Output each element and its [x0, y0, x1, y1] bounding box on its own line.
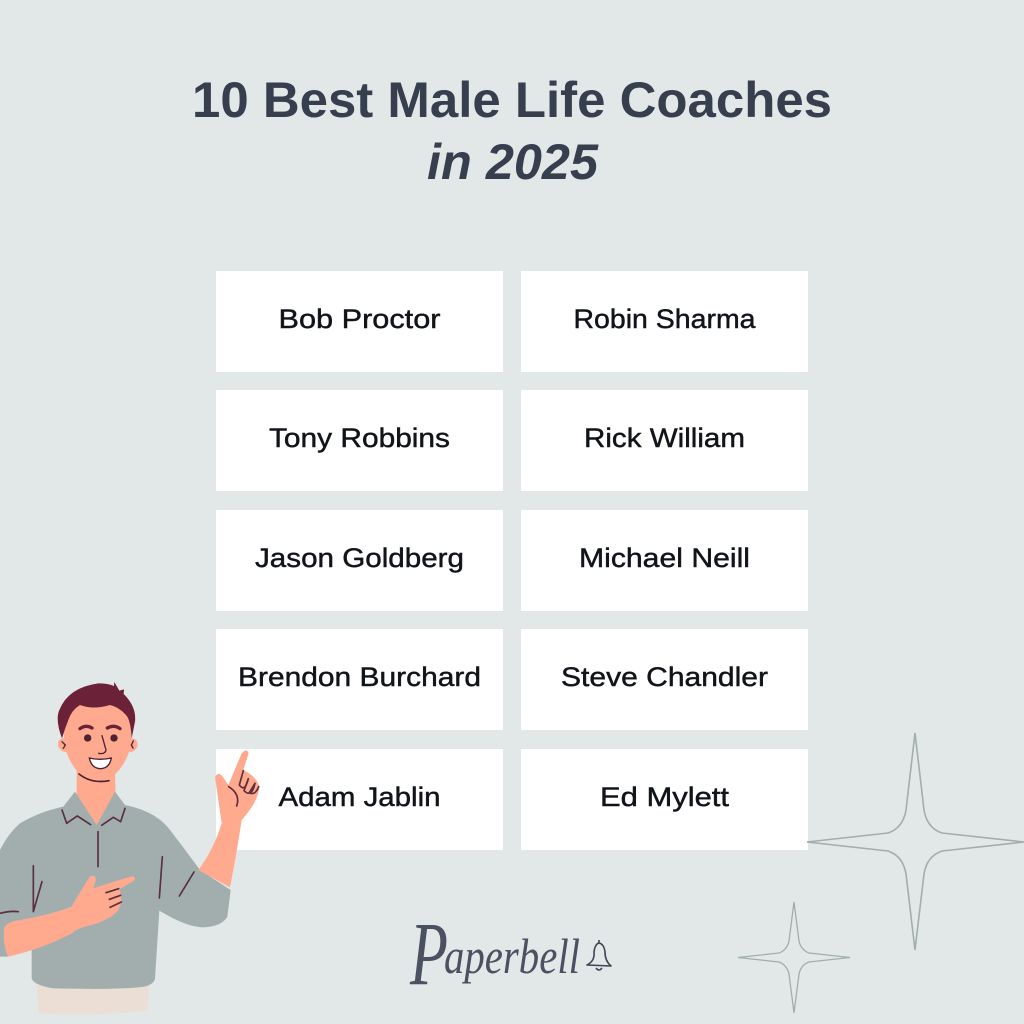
illustration: man pointing — [0, 682, 259, 1015]
card: Bob Proctor: Bob Proctor — [278, 304, 440, 334]
logo: Paperbell — [409, 905, 611, 1004]
logo: Paperbell: P — [409, 905, 448, 1004]
card: Jason Goldberg — [216, 510, 503, 611]
card: Bob Proctor — [216, 271, 503, 372]
card: Brendon Burchard — [216, 629, 503, 730]
card: Adam Jablin: Adam Jablin — [278, 782, 440, 812]
card: Jason Goldberg: Jason Goldberg — [255, 543, 464, 573]
shirt and hand lines — [0, 771, 259, 913]
card: Rick William: Rick William — [584, 423, 745, 453]
shirt — [0, 792, 231, 989]
title: in 2025 — [427, 134, 599, 190]
face details — [62, 726, 133, 781]
eyes — [84, 734, 118, 742]
title — [192, 72, 832, 190]
card: Adam Jablin — [216, 749, 503, 850]
hair — [58, 682, 135, 738]
panel: coach names grid — [216, 271, 808, 850]
card: Tony Robbins — [216, 390, 503, 491]
logo: Paperbell: aperbell — [444, 928, 580, 984]
card: Ed Mylett: Ed Mylett — [600, 782, 730, 812]
decoration: large star — [807, 733, 1024, 950]
trousers — [37, 985, 149, 1015]
face — [64, 703, 131, 782]
card: Michael Neill — [521, 510, 808, 611]
card: Tony Robbins: Tony Robbins — [269, 423, 450, 453]
smile — [89, 758, 111, 769]
neck — [77, 770, 116, 827]
card: Rick William — [521, 390, 808, 491]
card: Steve Chandler — [521, 629, 808, 730]
card: Ed Mylett — [521, 749, 808, 850]
title: 10 Best Male Life Coaches — [192, 72, 832, 128]
card: Robin Sharma — [521, 271, 808, 372]
decoration: small star — [738, 902, 850, 1013]
ears — [58, 738, 138, 752]
card: Robin Sharma: Robin Sharma — [574, 304, 757, 334]
icon: bell — [587, 940, 611, 970]
card: Brendon Burchard: Brendon Burchard — [238, 662, 481, 692]
raised forearm and hand — [198, 750, 259, 887]
card: Steve Chandler: Steve Chandler — [561, 662, 768, 692]
card: Michael Neill: Michael Neill — [579, 543, 750, 573]
left forearm and pointing hand — [4, 876, 135, 957]
